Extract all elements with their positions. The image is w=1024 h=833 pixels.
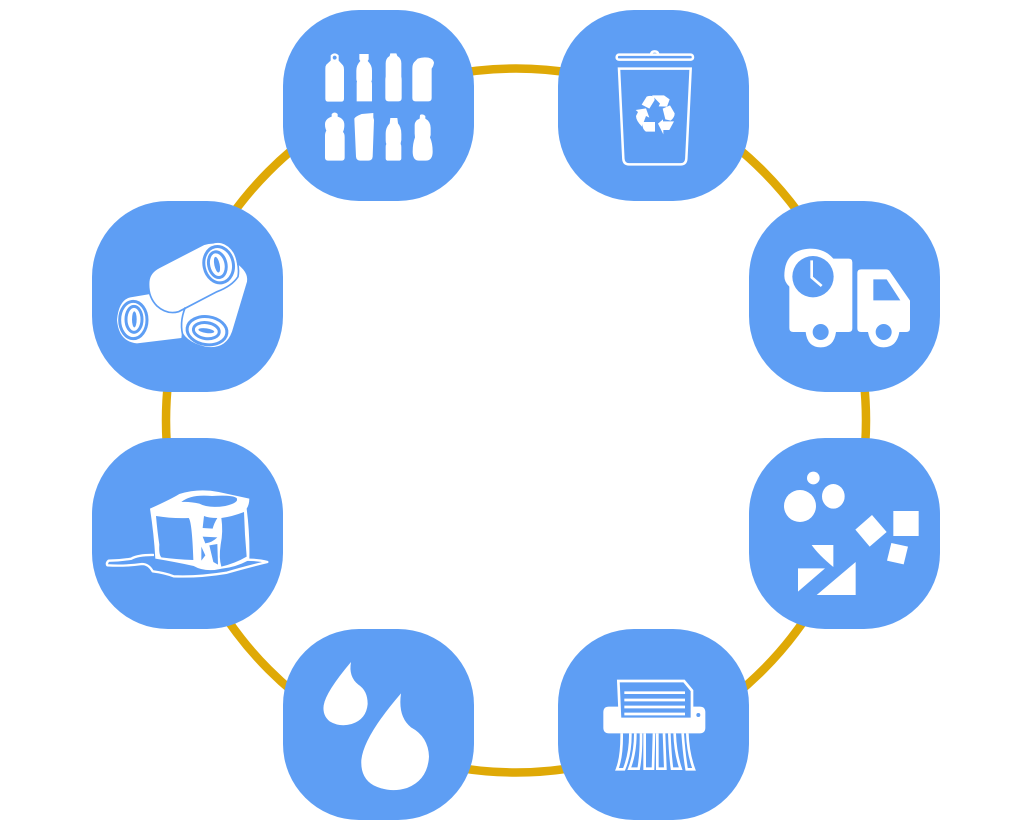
icon: bin with recycling symbol bbox=[617, 51, 693, 164]
icon: circles, squares and triangles bbox=[784, 472, 919, 595]
ring connecting the steps bbox=[166, 68, 866, 772]
panel: delivery truck bbox=[749, 201, 940, 392]
icon: melting ice cube bbox=[107, 490, 267, 577]
icon: eight bottles bbox=[325, 53, 434, 161]
panel: plastic bottles bbox=[283, 10, 474, 201]
icon: shredder with paper strips bbox=[603, 681, 705, 769]
icon: three rolls bbox=[117, 240, 247, 347]
panel: shredded fragments bbox=[749, 438, 940, 629]
panel: water drops bbox=[283, 629, 474, 820]
panel: log rolls bbox=[92, 201, 283, 392]
icon: truck with clock bbox=[784, 249, 910, 347]
panel: melting ice bbox=[92, 438, 283, 629]
panel: paper shredder bbox=[558, 629, 749, 820]
panel: recycling bin bbox=[558, 10, 749, 201]
icon: two drops bbox=[323, 662, 429, 790]
